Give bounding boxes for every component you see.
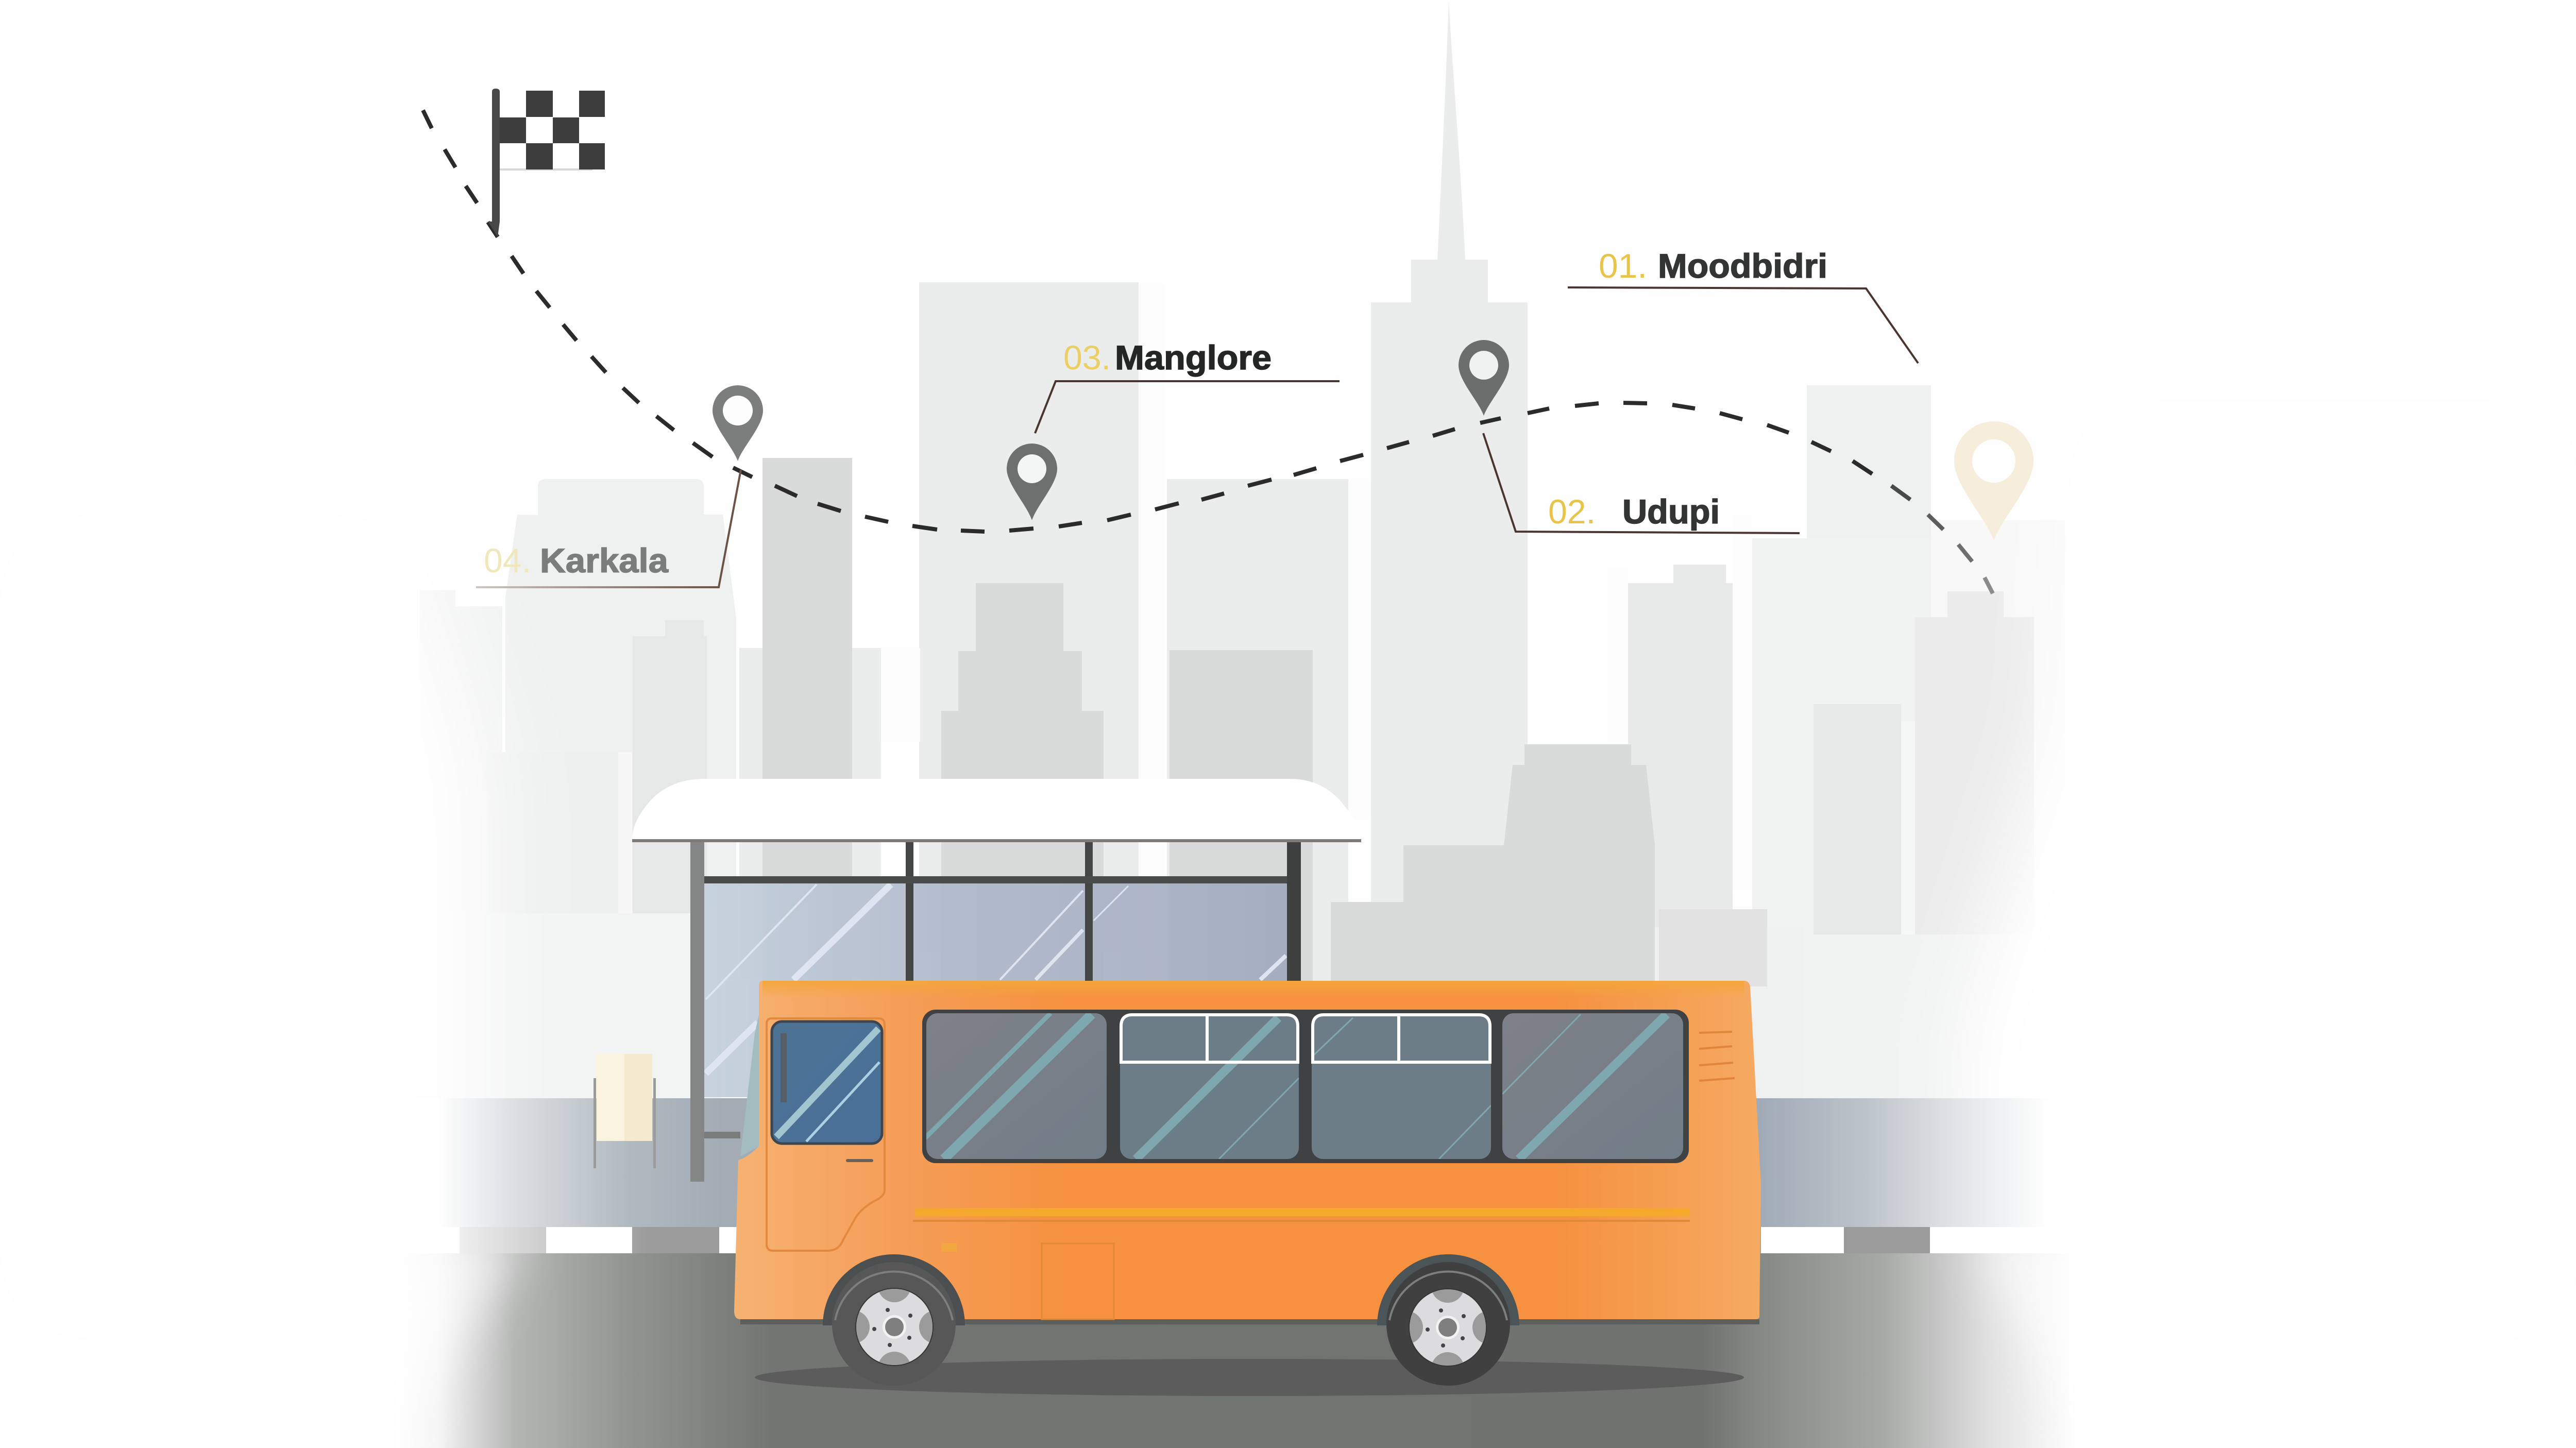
bus shelter (632, 779, 1361, 1182)
pane 1 (922, 1013, 1107, 1159)
bus body (734, 981, 1761, 1319)
label: 04 Karkala (476, 470, 741, 587)
icon: checkered finish flag (488, 89, 605, 237)
glass reflections (706, 884, 1286, 1074)
windshield sliver (740, 1013, 759, 1156)
label: 01 Moodbidri: Moodbidri (1658, 247, 1827, 285)
dashed route (423, 110, 1993, 593)
label: 01 Moodbidri (1568, 247, 1918, 363)
glass panels (704, 883, 1287, 1097)
underbody line (740, 1319, 1759, 1324)
pin: Moodbidri start (1954, 421, 2033, 540)
pin: Karkala (713, 385, 763, 461)
white fade right (1958, 402, 2576, 1339)
bus stop sign (594, 1054, 656, 1168)
pane 2 (1120, 1013, 1299, 1159)
rear wheel (1377, 1254, 1519, 1386)
small marker (941, 1243, 957, 1252)
roof highlight (762, 981, 1744, 998)
roadside verge (438, 1098, 2050, 1227)
label: 02 Udupi: 02. (1548, 492, 1596, 531)
label: 03 Manglore: Manglore (1115, 338, 1272, 377)
white gaps between buildings (618, 282, 1915, 952)
window frame (922, 1010, 1689, 1163)
label: 04 Karkala: Karkala (540, 541, 669, 580)
white fade left (0, 515, 489, 1339)
road shadow under bus (755, 1359, 1744, 1396)
curb (460, 1227, 2016, 1253)
door handle (846, 1159, 873, 1162)
vents (1699, 1032, 1735, 1081)
road edge fade (392, 1236, 2081, 1432)
bus (734, 981, 1761, 1386)
label: 03 Manglore (1035, 338, 1340, 433)
label: 02 Udupi: Udupi (1622, 492, 1720, 531)
door window (772, 1021, 882, 1144)
door outline (767, 1018, 885, 1251)
low light band (412, 913, 721, 1098)
pin: Manglore (1007, 444, 1057, 520)
pane 4 (1502, 1013, 1683, 1159)
city skyline (412, 0, 2076, 1098)
road (392, 1253, 2081, 1448)
light buildings (420, 0, 2065, 1098)
darker buildings (762, 458, 1767, 1097)
shelter frame (690, 842, 1301, 1182)
label: 03 Manglore: 03. (1063, 338, 1111, 377)
luggage hatch (1042, 1243, 1114, 1319)
label: 02 Udupi (1483, 433, 1800, 533)
label: 01 Moodbidri: 01. (1599, 247, 1647, 285)
shelter roof (632, 779, 1361, 840)
pane 3 (1312, 1013, 1491, 1159)
side stripes (913, 1208, 1690, 1222)
front wheel (823, 1254, 965, 1386)
pin: Udupi (1459, 340, 1509, 416)
label: 04 Karkala: 04. (484, 541, 531, 580)
